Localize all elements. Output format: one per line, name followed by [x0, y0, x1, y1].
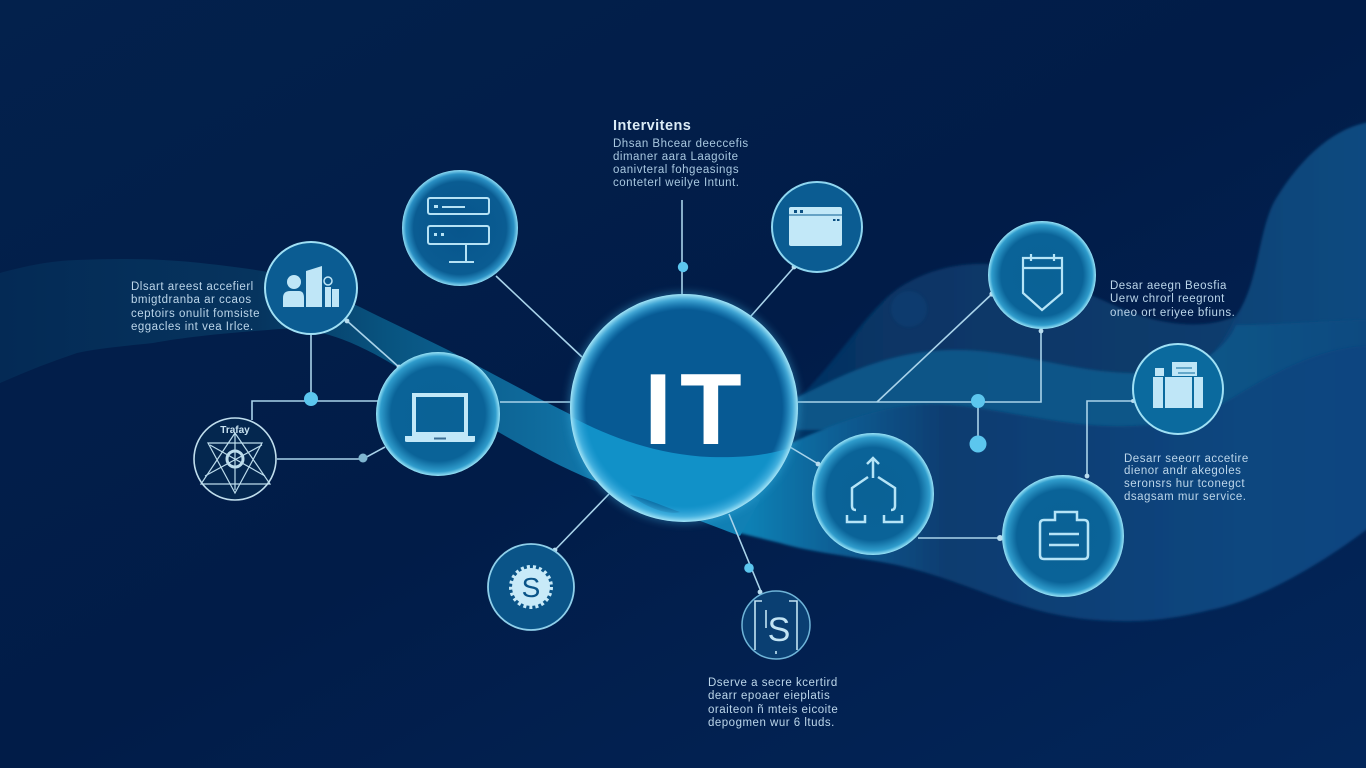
- node: files: [1133, 344, 1223, 434]
- text block: top: [613, 138, 749, 189]
- node: shield: [988, 221, 1096, 329]
- text block: bottom: depogmen wur 6 ltuds.: [708, 717, 835, 729]
- connector lines: [252, 200, 1134, 594]
- background wave: back band: [796, 264, 1240, 460]
- node: browser window: [772, 182, 862, 272]
- node: gear: [488, 544, 574, 630]
- text block: bottom: oraiteon ñ mteis eicoite: [708, 704, 838, 716]
- text block: top: Dhsan Bhcear deeccefis: [613, 138, 749, 150]
- node: star emblem: [194, 418, 276, 500]
- text block: left: ceptoirs onulit fomsiste: [131, 308, 260, 320]
- text block: right upper: [1110, 280, 1235, 319]
- background wave: soft blob: [891, 291, 927, 327]
- background wave: upper right shape: [1205, 122, 1366, 430]
- arrow tips: [345, 265, 1135, 594]
- text block: top: oanivteral fohgeasings: [613, 164, 739, 176]
- text block: bottom: Dserve a secre kcertird: [708, 677, 838, 689]
- text block: bottom: [708, 677, 838, 729]
- node: clipboard: [1002, 475, 1124, 597]
- text block: right lower: dsagsam mur service.: [1124, 491, 1246, 503]
- text block: left: bmigtdranba ar ccaos: [131, 294, 252, 306]
- text block: right upper: Desar aeegn Beosfia: [1110, 280, 1227, 292]
- background wave: lighter middle band: [796, 320, 1366, 430]
- background wave: flowing band from left: [0, 259, 760, 536]
- text block: right lower: [1124, 452, 1249, 503]
- text block: right lower: seronsrs hur tconegct: [1124, 478, 1245, 490]
- text block: top: dimaner aara Laagoite: [613, 151, 739, 163]
- node: people and chart: [265, 242, 357, 334]
- IT label: IT: [644, 354, 750, 466]
- background wave: lower right shape: [727, 346, 1366, 621]
- hub: IT: [568, 292, 800, 530]
- node: server: [402, 170, 518, 286]
- heading: Intervitens: [613, 118, 691, 134]
- text block: right lower: Desarr seeorr accetire: [1124, 452, 1249, 464]
- text block: right upper: oneo ort eriyee bfiuns.: [1110, 307, 1235, 319]
- text block: bottom: dearr epoaer eieplatis: [708, 690, 830, 702]
- node: branch: [812, 433, 934, 555]
- text block: left: eggacles int vea Irlce.: [131, 321, 254, 333]
- text block: left: [131, 281, 260, 333]
- node: S document: [742, 591, 810, 659]
- gear symbol: S: [522, 572, 540, 603]
- connector nodes: [304, 262, 986, 573]
- node: laptop: [376, 352, 500, 476]
- text block: left: Dlsart areest accefierl: [131, 281, 254, 293]
- text block: right lower: dienor andr akegoles: [1124, 465, 1241, 477]
- text block: top: conteterl weilye Intunt.: [613, 177, 739, 189]
- text block: right upper: Uerw chrorl reegront: [1110, 293, 1225, 305]
- emblem label: Trafay: [220, 425, 250, 436]
- document symbol: S: [768, 611, 790, 649]
